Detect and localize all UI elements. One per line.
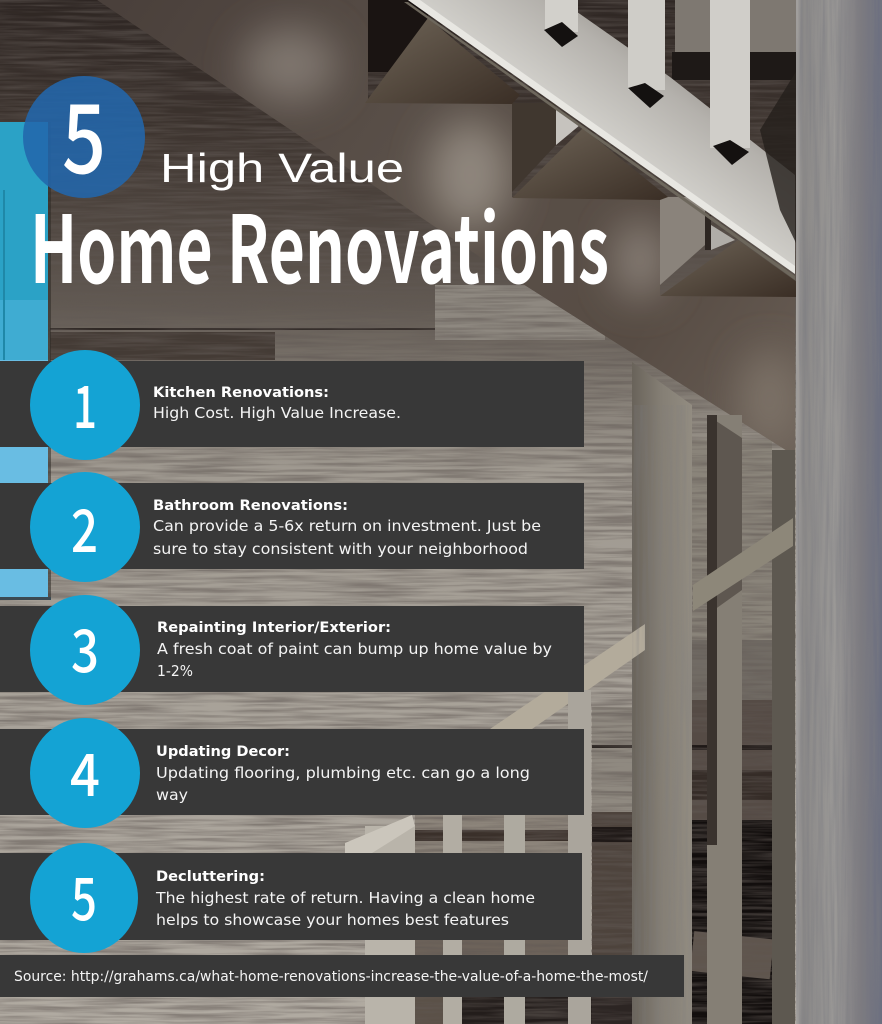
number badge 4: [30, 718, 140, 828]
main title: Home Renovations: [30, 175, 609, 310]
description: decluttering: [155, 889, 535, 929]
number badge 3: [30, 595, 140, 705]
number badge 1: [30, 350, 140, 460]
heading: repainting: Repainting Interior/Exterior:: [157, 620, 391, 636]
panel: step 4 decor: [0, 718, 584, 828]
subtitle: High Value: [160, 145, 404, 191]
panel: step 3 repainting: [0, 595, 584, 705]
heading: kitchen renovations: Kitchen Renovations:: [153, 385, 329, 401]
panel: step 2 bathroom: [0, 472, 584, 582]
heading: decluttering: Decluttering:: [156, 869, 265, 885]
description: bathroom: [153, 517, 541, 558]
number badge 5: [30, 843, 138, 953]
number badge 2: 2: [71, 484, 98, 569]
description: decor: way: [156, 786, 188, 804]
number badge 2: [30, 472, 140, 582]
description: bathroom: sure to stay consistent with your neighborhood: [153, 540, 528, 558]
description: kitchen: High Cost. High Value Increase.: [153, 404, 401, 422]
heading: updating decor: Updating Decor:: [156, 744, 290, 760]
panel: step 5 decluttering: [0, 843, 582, 953]
description: decluttering: The highest rate of return. Having a clean home: [155, 889, 535, 907]
number badge 5: 5: [71, 852, 97, 937]
header badge circle with 5: 5: [62, 62, 106, 201]
header badge circle with 5: [23, 62, 145, 201]
panel: step 1 kitchen: [0, 350, 584, 460]
number badge 4: 4: [70, 728, 100, 813]
description: repainting: 1-2%: [157, 662, 193, 680]
description: decor: Updating flooring, plumbing etc. can go a long: [156, 764, 530, 782]
heading: bathroom renovations: Bathroom Renovations:: [153, 498, 348, 514]
description: bathroom: Can provide a 5-6x return on investment. Just be: [153, 517, 541, 535]
description: decluttering: helps to showcase your homes best features: [156, 911, 509, 929]
source bar: Source: http://grahams.ca/what-home-renovations-increase-the-value-of-a-home-the-most/: [14, 969, 648, 985]
source bar: [0, 955, 684, 997]
number badge 3: 3: [71, 604, 99, 689]
title block: [23, 62, 609, 310]
description: decor: [156, 764, 530, 804]
description: repainting: A fresh coat of paint can bump up home value by: [157, 640, 552, 658]
number badge 1: 1: [73, 360, 97, 445]
description: repainting: [157, 640, 552, 680]
